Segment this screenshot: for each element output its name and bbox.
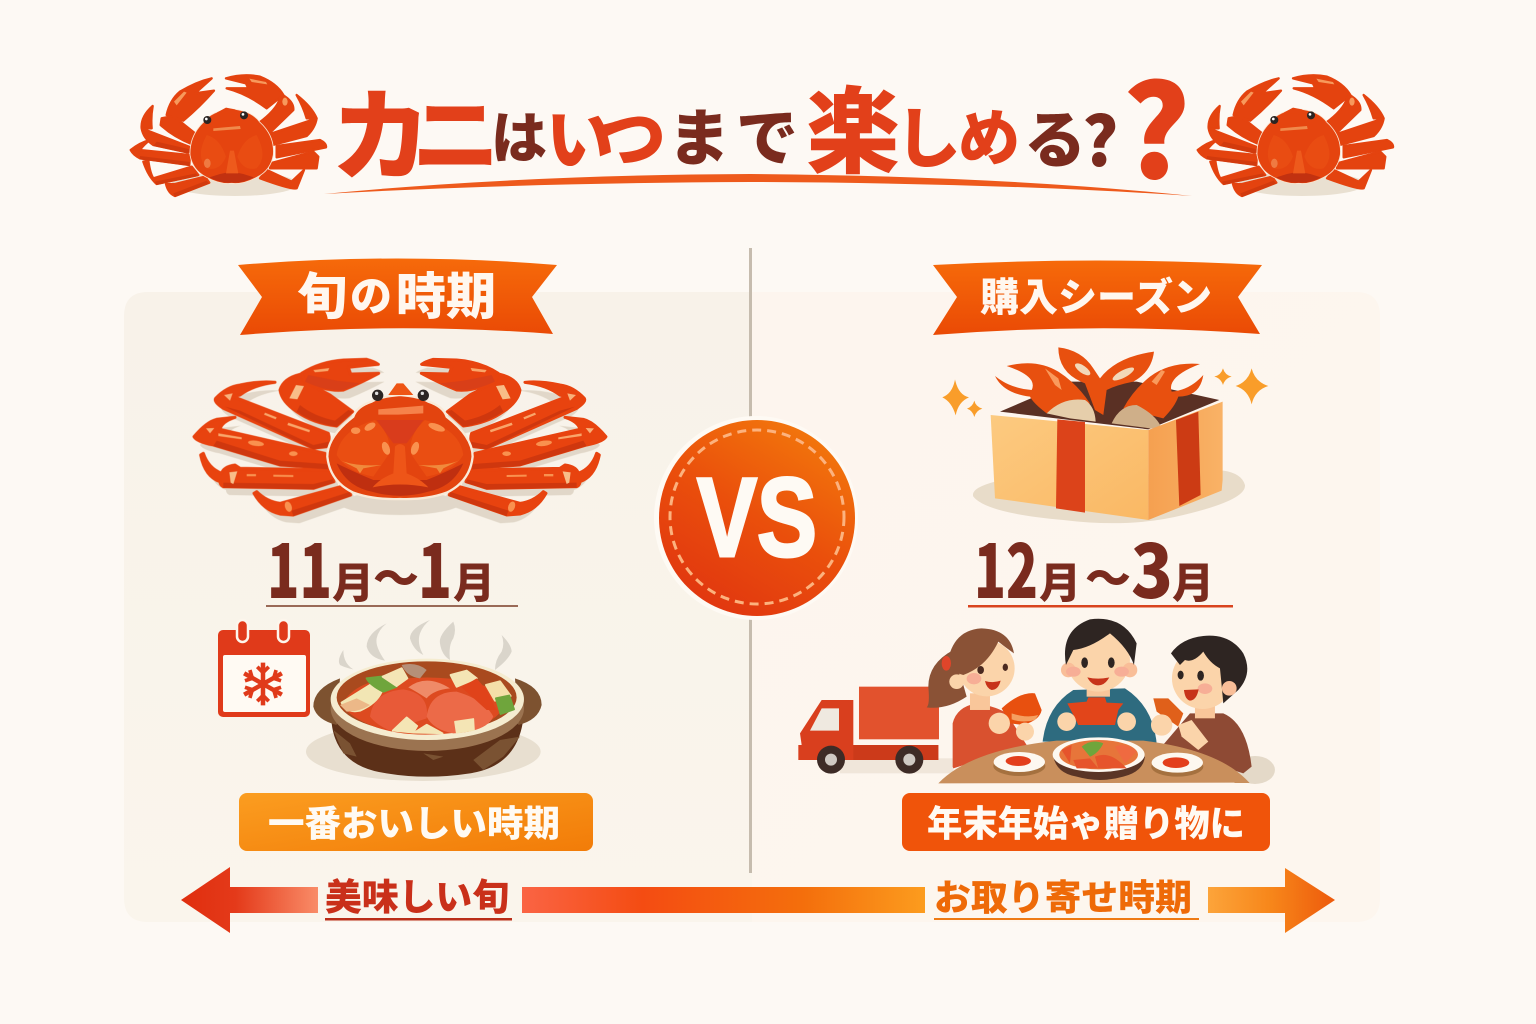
- right banner text: 購入シーズン: [980, 267, 1212, 323]
- label: new year and gifts: [902, 793, 1270, 851]
- middle boy: [1043, 619, 1157, 743]
- title: ま: [668, 88, 730, 178]
- title: つ: [600, 86, 666, 182]
- title: ニ: [412, 66, 500, 193]
- truck wheels: [817, 746, 923, 774]
- plates and food: [993, 737, 1203, 780]
- left banner text: [297, 257, 496, 329]
- title: カ: [331, 56, 431, 201]
- title underline: [324, 174, 1192, 196]
- title: し: [895, 86, 961, 182]
- title: め: [958, 88, 1020, 178]
- table: [938, 741, 1249, 783]
- crab body: [327, 383, 473, 499]
- hot pot: [306, 620, 542, 781]
- date right: 12: [974, 513, 1038, 620]
- date left: 月: [332, 550, 374, 611]
- left banner text: の: [350, 263, 392, 324]
- title crab left: [131, 75, 326, 197]
- arrow: right: [1208, 868, 1335, 933]
- arrow label left: 美味しい旬: [325, 867, 509, 921]
- box faces: [991, 415, 1148, 520]
- crab claws: [995, 347, 1203, 428]
- right banner: [933, 260, 1262, 335]
- table shadow: [1235, 756, 1275, 784]
- calendar icon: [218, 620, 310, 717]
- crab legs and claws: [194, 359, 606, 516]
- crab eyes: [372, 390, 429, 401]
- box interior: [1000, 382, 1219, 429]
- left banner text: 旬: [297, 257, 347, 329]
- big crab: [194, 359, 606, 523]
- gift box with crab claws: [942, 347, 1268, 523]
- stew: [340, 664, 514, 735]
- date left: 11: [267, 513, 332, 620]
- box shadow: [973, 471, 1245, 523]
- center divider: [749, 248, 752, 873]
- VS badge: [654, 416, 858, 620]
- pot shadow: [306, 722, 541, 781]
- arrow: middle bar: [522, 887, 925, 913]
- crab shadow: [200, 368, 600, 523]
- delivery truck: [798, 687, 953, 774]
- date right: 〜: [1085, 543, 1131, 609]
- right boy: [1151, 636, 1252, 773]
- sparkles: [942, 368, 1268, 417]
- title: で: [736, 88, 798, 178]
- title crab right: [1198, 75, 1393, 197]
- date right: 月: [1039, 550, 1081, 611]
- date left: [267, 513, 495, 620]
- label text: 一番おいしい時期: [268, 795, 560, 847]
- ribbons: [1056, 419, 1085, 513]
- truck window: [810, 708, 839, 731]
- title: る: [1024, 90, 1086, 180]
- title: ?: [1082, 87, 1118, 186]
- steam: [339, 620, 512, 670]
- arrow: left: [181, 867, 318, 933]
- truck cargo: [859, 687, 939, 739]
- panel: background card: [124, 292, 1380, 922]
- girl: [927, 628, 1042, 768]
- date right underline: [968, 605, 1233, 608]
- label text: 年末年始ゃ贈り物に: [927, 795, 1245, 847]
- title: い: [546, 85, 614, 184]
- date right: 月: [1172, 550, 1214, 611]
- VS text: VS: [697, 455, 817, 580]
- title: 楽: [806, 57, 900, 193]
- left banner: [238, 257, 557, 335]
- family eating crab: [927, 619, 1275, 784]
- date left underline: [266, 605, 518, 607]
- pot bowl: [332, 723, 523, 777]
- label: best season: [239, 793, 593, 851]
- pot handles: [313, 678, 542, 725]
- date left: 月: [453, 550, 495, 611]
- date right: [974, 513, 1214, 620]
- title: は: [491, 94, 547, 175]
- truck cab: [798, 700, 938, 760]
- arrow label right: お取り寄せ時期: [934, 869, 1192, 921]
- date left: 〜: [373, 543, 419, 609]
- date left: 1: [418, 513, 452, 620]
- title: ?: [1122, 30, 1191, 215]
- left banner text: 時期: [396, 257, 496, 329]
- title: [331, 30, 1191, 215]
- date right: 3: [1131, 513, 1173, 620]
